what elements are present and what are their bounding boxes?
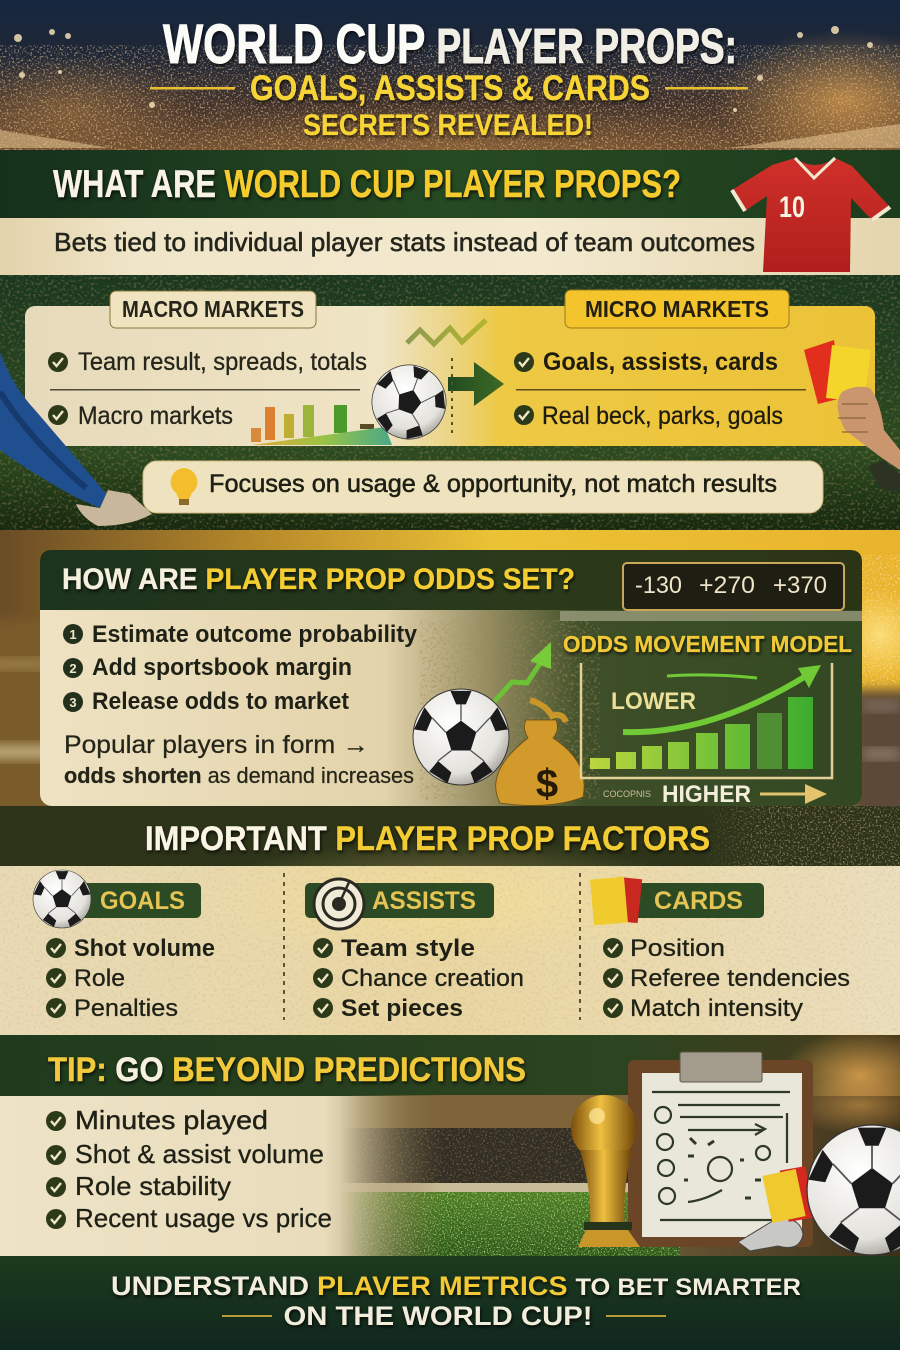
title line 1: WORLD CUP PLAYER PROPS: bbox=[163, 12, 737, 75]
tip list bbox=[46, 1105, 332, 1233]
callout: usage and opportunity: Focuses on usage & opportunity, not match results bbox=[209, 470, 777, 498]
column: cards: Position bbox=[630, 935, 725, 962]
stadium and pitch backdrop bbox=[340, 1095, 680, 1256]
column: cards bbox=[590, 877, 850, 1022]
arrow: macro to micro bbox=[407, 320, 504, 438]
column: cards: Match intensity bbox=[630, 995, 803, 1022]
numbered steps: 3 bbox=[69, 695, 77, 710]
numbered steps: Release odds to market bbox=[92, 688, 349, 715]
micro markets tag: MICRO MARKETS bbox=[585, 296, 769, 322]
note: popular players: odds shorten as demand increases bbox=[64, 763, 414, 788]
icon: hand with cards bbox=[804, 340, 900, 492]
panel: tip bbox=[0, 1030, 900, 1256]
comparison card bbox=[25, 306, 875, 446]
tip list: Shot & assist volume bbox=[75, 1139, 324, 1169]
column: goals: GOALS bbox=[100, 887, 185, 915]
odds card bbox=[40, 570, 862, 806]
panel: important factors bbox=[0, 806, 900, 1035]
macro list bbox=[48, 348, 367, 430]
column: cards: CARDS bbox=[654, 887, 743, 915]
column: goals: Penalties bbox=[74, 995, 178, 1022]
icon: red jersey bbox=[732, 158, 890, 272]
icon: large soccer ball bbox=[807, 1125, 900, 1255]
icon: kicking leg bbox=[0, 353, 152, 526]
macro markets tag bbox=[110, 291, 316, 328]
odds board: +370 bbox=[773, 572, 827, 599]
macro list: Macro markets bbox=[78, 402, 233, 430]
column: goals: Role bbox=[74, 965, 125, 992]
title line 2: GOALS, ASSISTS & CARDS bbox=[250, 69, 650, 108]
definition text: Bets tied to individual player stats instead of team outcomes bbox=[54, 227, 755, 257]
micro list: Goals, assists, cards bbox=[543, 348, 778, 376]
note: popular players: Popular players in form → bbox=[64, 731, 369, 759]
micro list bbox=[514, 348, 806, 430]
icon: ball and money bag bbox=[413, 642, 584, 806]
column: assists: ASSISTS bbox=[372, 887, 476, 915]
tip list: Recent usage vs price bbox=[75, 1203, 332, 1233]
icon: whistle bbox=[738, 1219, 803, 1251]
chart title: ODDS MOVEMENT MODEL bbox=[563, 631, 852, 657]
chart: odds movement model: LOWER bbox=[611, 688, 696, 715]
chart: odds movement model: HIGHER bbox=[662, 781, 751, 808]
numbered steps bbox=[63, 621, 418, 715]
odds board: +270 bbox=[699, 572, 755, 599]
chart: odds movement model bbox=[563, 631, 852, 808]
header banner bbox=[0, 0, 900, 195]
column: assists: Team style bbox=[341, 935, 475, 962]
column: assists: Set pieces bbox=[341, 995, 463, 1022]
tip list: Role stability bbox=[75, 1171, 231, 1201]
icon: light bulb bbox=[171, 468, 197, 505]
icon: trophy bbox=[571, 1095, 640, 1247]
column: goals: Shot volume bbox=[74, 935, 215, 962]
note: popular players bbox=[64, 731, 414, 788]
column: assists bbox=[305, 879, 524, 1022]
panel: how odds are set bbox=[0, 530, 900, 820]
heading: odds: HOW ARE PLAYER PROP ODDS SET? bbox=[62, 563, 575, 596]
odds board: -130 bbox=[635, 572, 682, 599]
panel: macro vs micro markets bbox=[0, 275, 900, 530]
column: assists: Chance creation bbox=[341, 965, 524, 992]
micro list: Real beck, parks, goals bbox=[542, 402, 783, 430]
icon: clipboard bbox=[628, 1052, 813, 1247]
heading: tip: TIP: GO BEYOND PREDICTIONS bbox=[48, 1051, 526, 1089]
numbered steps: Estimate outcome probability bbox=[92, 621, 418, 648]
odds board bbox=[623, 563, 844, 610]
icon: soccer ball bbox=[362, 355, 456, 449]
footer line 2: ON THE WORLD CUP! bbox=[284, 1301, 592, 1331]
footer banner bbox=[0, 1256, 900, 1350]
numbered steps: Add sportsbook margin bbox=[92, 654, 352, 681]
tip list: Minutes played bbox=[75, 1105, 268, 1135]
macro markets tag: MACRO MARKETS bbox=[122, 296, 304, 322]
title line 3: SECRETS REVEALED! bbox=[303, 109, 593, 142]
numbered steps: 2 bbox=[69, 661, 77, 676]
chart: odds movement model: COCOPNIS bbox=[603, 789, 651, 799]
panel: what are player props bbox=[0, 150, 900, 275]
macro list: Team result, spreads, totals bbox=[78, 348, 367, 376]
numbered steps: 1 bbox=[69, 627, 77, 642]
column: cards: Referee tendencies bbox=[630, 965, 850, 992]
heading: what are player props: WHAT ARE WORLD CUP PLAYER PROPS? bbox=[53, 163, 681, 206]
column: goals bbox=[33, 870, 215, 1022]
callout: usage and opportunity bbox=[143, 461, 823, 513]
icon: red jersey: 10 bbox=[779, 191, 805, 224]
heading: factors: IMPORTANT PLAYER PROP FACTORS bbox=[145, 820, 710, 858]
mini bar chart bbox=[251, 405, 392, 445]
icon: red and yellow cards bbox=[762, 1166, 814, 1223]
footer line 1: UNDERSTAND PLAVER METRICS TO BET SMARTER bbox=[111, 1271, 801, 1301]
micro markets tag bbox=[565, 290, 789, 328]
icon: ball and money bag: $ bbox=[536, 762, 558, 806]
